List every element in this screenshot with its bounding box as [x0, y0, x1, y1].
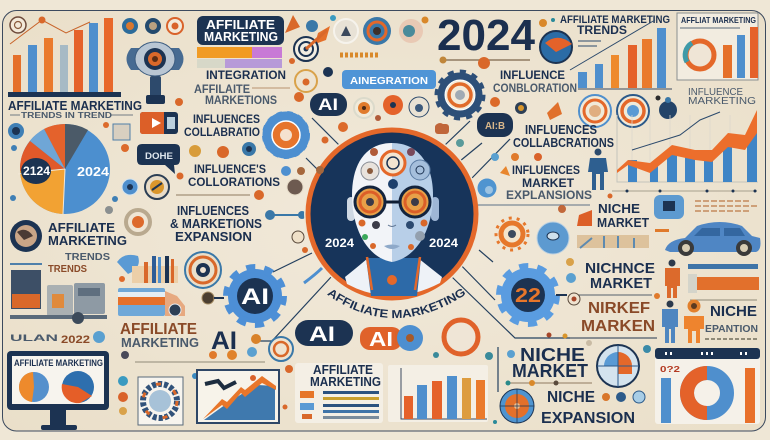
- icon: target with dart: [306, 30, 327, 49]
- small dotted row: [608, 190, 757, 211]
- heading: affiliate marketing trends: TRENDS IN TREND: [21, 111, 112, 120]
- progress bars: [197, 47, 282, 68]
- text: affiliate marketions: AFFILAITE: [194, 82, 250, 96]
- text: influences collabcrations: INFLUENCES: [525, 123, 597, 137]
- text: nirkef marken: [570, 293, 660, 338]
- panel: bar chart bottom: [388, 365, 488, 422]
- text: affiliate marketing trends: TRENDS: [577, 23, 627, 37]
- text: affiliate marketions: MARKETIONS: [205, 93, 277, 107]
- icon: robot head and shoulders: [345, 143, 442, 296]
- text: 2024 right: 2024: [429, 236, 458, 250]
- monitor with pies: AFFILIATE MARKETING: [14, 358, 103, 368]
- icon: radar chart: [597, 345, 639, 387]
- connector lines to the central portrait: [258, 118, 657, 392]
- text: influences and marketions expansion: EXPANSION: [175, 230, 252, 244]
- pill: AI navy: [295, 320, 353, 346]
- bar chart: trends: [570, 20, 672, 89]
- text: influences market explansions: EXPLANSIONS: [506, 188, 592, 202]
- heading: affiliate marketing trends: [8, 98, 142, 120]
- text: nirkef marken: NIRKEF: [588, 300, 650, 317]
- icon: ring badge: [185, 252, 221, 288]
- icon: blue gear with 22: [500, 258, 580, 338]
- small year label row: 2022: [61, 334, 90, 346]
- icon: orange ring: [444, 320, 478, 354]
- icon: AI gear: [202, 268, 283, 324]
- small decorations row: [176, 142, 306, 220]
- pie chart: 2124: [23, 164, 50, 178]
- pill: AI orange: AI: [369, 329, 393, 351]
- icon: square button: [654, 195, 684, 219]
- pill: AI B: AI:B: [485, 121, 505, 132]
- icon: blue car: [665, 222, 760, 256]
- icon: dark portrait badge: [10, 220, 42, 252]
- icon: blue person: [588, 148, 608, 190]
- panel: browser window with donut: [655, 348, 760, 424]
- icon: blue gear with orange hub: [265, 114, 307, 156]
- text: niche epantion: [705, 303, 758, 339]
- icon: blue connector circle: [395, 325, 423, 351]
- text: influences collabratio: COLLABRATIO: [184, 125, 260, 139]
- text: affiliate marketing trends: AFFILIATE MARKETING: [560, 14, 670, 26]
- text: niche expansion: EXPANSION: [541, 410, 635, 427]
- text: influences market explansions: [506, 163, 592, 202]
- pill: AI small navy: [310, 93, 347, 116]
- text: influences and marketions expansion: [170, 204, 262, 244]
- panel: affiliate marketing chart top right: AFFLIAT MARKETING: [681, 15, 756, 25]
- pill: AI small navy: AI: [318, 95, 338, 114]
- panel: affiliate marketing list: [295, 363, 383, 423]
- text: influence marketing right: MARKETING: [688, 95, 756, 107]
- text: niche expansion: NICHE: [547, 389, 595, 406]
- text: trends labels: TRENDS: [65, 251, 110, 263]
- icon: navy gear top right: [437, 72, 483, 118]
- text: influences collorations: INFLUENCE'S: [194, 162, 266, 176]
- mini bars and badge: [117, 255, 178, 283]
- icon: ring with at sign: [269, 337, 293, 361]
- text: affiliate marketing left: [48, 221, 127, 248]
- curved label: affiliate marketing: AFFILIATE MARKETING: [327, 289, 465, 318]
- panel: affiliate marketing list: MARKETING: [310, 375, 381, 389]
- icons: three round badges: [122, 18, 183, 34]
- text: influences collabcrations: COLLABCRATIONS: [513, 136, 614, 150]
- icon: orange person second: [684, 300, 704, 343]
- text: influence conbloration: [493, 68, 577, 95]
- pill: AI integration: AINEGRATION: [350, 75, 428, 87]
- text: affiliate marketing brown: MARKETING: [121, 335, 199, 350]
- icon: camera on stand: [126, 42, 184, 104]
- icon: orange-black badge: [145, 175, 169, 199]
- text: influence marketing right: [688, 86, 756, 107]
- text: nichnce market: [585, 260, 655, 292]
- text: influences collabratio: [184, 112, 260, 139]
- central portrait medallion: [304, 126, 480, 302]
- small dots between gear and heading: [435, 97, 562, 176]
- text: niche market large: MARKET: [512, 361, 588, 381]
- icon: orange badge: [500, 389, 534, 423]
- pill: AI orange: [360, 327, 402, 351]
- decorative illegible band: [577, 229, 669, 248]
- small dots below portrait right: [433, 340, 651, 424]
- icon: target top: [294, 37, 318, 61]
- pill: AI integration: [342, 70, 436, 89]
- pill: AI B: [477, 113, 513, 137]
- icon: orange small gear: [496, 218, 528, 250]
- icon: speech bubble: DOHE: [145, 151, 173, 161]
- pill: AI navy: AI: [309, 323, 335, 346]
- icons: target rings right: [579, 95, 677, 127]
- text: AI label: AI: [211, 327, 237, 355]
- text: influences market explansions: INFLUENCES: [512, 163, 580, 177]
- text: affiliate marketing left: AFFILIATE: [48, 221, 115, 235]
- line and bar chart right: [617, 110, 758, 182]
- icon: small cream gear: [126, 210, 150, 234]
- panel: affiliate marketing chart top right: [677, 13, 758, 80]
- icons: grey and orange badges top: [334, 16, 428, 45]
- text: 2024 left: 2024: [325, 236, 354, 250]
- pie chart: [18, 124, 110, 214]
- heading: affiliate marketing trends: AFFILIATE MARKETING: [8, 98, 142, 113]
- small decorations around portrait: [285, 15, 380, 283]
- icon: speech bubble: [137, 144, 180, 174]
- text: niche market large: NICHE: [520, 345, 585, 365]
- icon: blue person second: [662, 300, 678, 343]
- text: niche market: [577, 201, 649, 230]
- bar chart: top left: [8, 16, 121, 97]
- panel: growth chart: [197, 370, 279, 423]
- text: niche market: MARKET: [597, 215, 649, 230]
- icon: AI gear: AI: [241, 284, 269, 309]
- icon: video player: [140, 112, 178, 134]
- badge: affiliate marketing title: MARKETING: [204, 29, 278, 44]
- text: niche epantion: NICHE: [710, 303, 757, 320]
- text: affiliate marketing trends: [560, 14, 670, 37]
- bars beside person: [688, 264, 759, 300]
- badge: affiliate marketing title: [197, 16, 284, 45]
- line decoration under 2024: [440, 18, 555, 69]
- text: influence marketing right: INFLUENCE: [688, 86, 743, 98]
- pie chart: 2024: [77, 164, 110, 179]
- icon: blue badge: [478, 178, 590, 213]
- monitor with pies: [7, 351, 109, 430]
- text: influence conbloration: INFLUENCE: [500, 68, 565, 82]
- small year label row: ULAN: [10, 333, 58, 343]
- panel: affiliate marketing list: AFFILIATE: [313, 363, 373, 377]
- small icons beside niche: [602, 391, 645, 403]
- icon: bus or truck: [118, 288, 185, 316]
- badge: affiliate marketing title: AFFILIATE: [206, 17, 275, 32]
- text: integration: INTEGRATION: [206, 68, 286, 82]
- text: nichnce market: MARKET: [590, 275, 652, 292]
- small dots near AI: [118, 334, 293, 415]
- icons: small badges around pie: [8, 122, 138, 214]
- icon: orange person: [665, 260, 680, 298]
- icon: blue disc: [537, 222, 569, 254]
- text: niche expansion: [541, 389, 635, 427]
- text: trends labels: [10, 251, 110, 275]
- text: trends labels: TRENDS: [48, 263, 87, 275]
- icon: pie badge: [540, 31, 601, 63]
- text: niche market large: [512, 345, 588, 381]
- text: influences and marketions expansion: & MARKETIONS: [170, 217, 262, 231]
- small year label row: [10, 331, 105, 346]
- text: niche market: NICHE: [598, 201, 640, 216]
- panel: browser window with donut: 0?2: [660, 364, 680, 374]
- text: influences market explansions: MARKET: [522, 176, 575, 190]
- text: affiliate marketing left: MARKETING: [48, 234, 127, 248]
- text: affiliate marketing brown: AFFILIATE: [120, 321, 197, 338]
- icons: ring cluster above portrait: [354, 95, 445, 133]
- panel: mosaic dial: [138, 377, 183, 425]
- text: affiliate marketing brown: [120, 321, 199, 350]
- text: 2024 large: 2024: [437, 11, 536, 60]
- icon: blue gear with 22: 22: [515, 285, 541, 307]
- icon: machine building: [10, 270, 107, 324]
- text: nirkef marken: MARKEN: [581, 318, 655, 335]
- text: influences collorations: COLLORATIONS: [188, 175, 280, 189]
- text: influences and marketions expansion: INFLUENCES: [177, 204, 249, 218]
- text: influences collorations: [188, 162, 280, 189]
- text: influences collabcrations: [513, 123, 614, 150]
- icon: target badge: [10, 17, 26, 33]
- text: affiliate marketions: [175, 82, 290, 107]
- text: niche epantion: EPANTION: [705, 323, 758, 335]
- text: nichnce market: NICHNCE: [585, 260, 655, 277]
- text: influence conbloration: CONBLORATION: [493, 81, 577, 95]
- text: influences collabratio: INFLUENCES: [193, 112, 260, 126]
